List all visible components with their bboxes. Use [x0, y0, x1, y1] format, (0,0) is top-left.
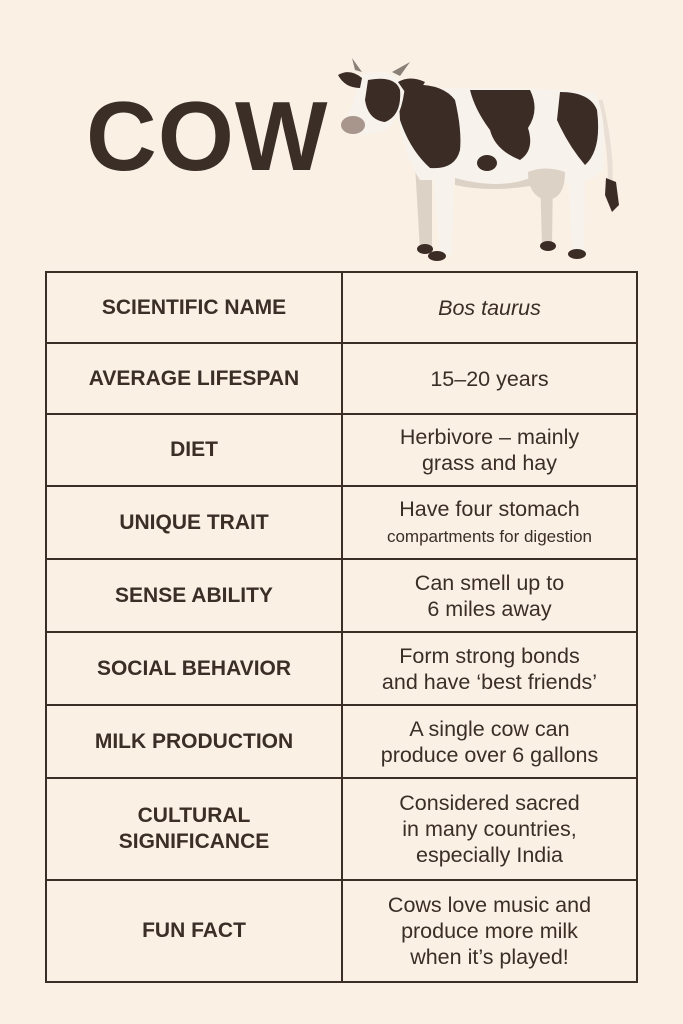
row: fun fact: FUN FACT [142, 919, 246, 942]
row: diet: Herbivore – mainly [400, 425, 579, 449]
row: sense: Can smell up to [415, 570, 564, 594]
row: unique trait: compartments for digestion [387, 526, 592, 546]
row: social [47, 633, 636, 706]
row: diet: DIET [170, 438, 218, 461]
row: lifespan: 15–20 years [430, 366, 549, 390]
row: scientific name: SCIENTIFIC NAME [102, 296, 286, 318]
body [395, 88, 604, 185]
row: fun fact: produce more milk [401, 919, 578, 943]
row: cultural [47, 779, 636, 881]
head [343, 72, 405, 135]
table [45, 271, 638, 983]
row: cultural: CULTURAL [138, 804, 250, 827]
row: milk [47, 706, 636, 779]
row: sense [47, 560, 636, 633]
row: milk: produce over 6 gallons [381, 742, 598, 766]
row: lifespan: AVERAGE LIFESPAN [89, 366, 299, 390]
row: social: SOCIAL BEHAVIOR [97, 656, 291, 680]
row: unique trait: Have four stomach [399, 496, 580, 520]
row: sense: SENSE ABILITY [115, 584, 273, 606]
icon: cow [338, 58, 619, 261]
row: diet [47, 415, 636, 487]
row: cultural: especially India [416, 843, 563, 867]
row: cultural: in many countries, [402, 817, 577, 841]
row: lifespan [47, 344, 636, 415]
udder [528, 168, 565, 200]
row: milk: A single cow can [409, 716, 570, 740]
spots [398, 85, 460, 168]
tail [600, 100, 610, 185]
row: cultural: SIGNIFICANCE [119, 830, 269, 853]
row: cultural: Considered sacred [399, 791, 580, 815]
row: fun fact: Cows love music and [388, 893, 591, 917]
back legs [540, 175, 553, 245]
front legs [415, 165, 432, 250]
row: scientific name: Bos taurus [438, 296, 541, 320]
row: social: Form strong bonds [399, 644, 580, 668]
row: milk: MILK PRODUCTION [95, 730, 293, 752]
title: COW [86, 81, 328, 191]
row: unique trait: UNIQUE TRAIT [119, 510, 269, 534]
row: diet: grass and hay [422, 451, 557, 475]
row: fun fact [142, 881, 591, 981]
row: fun fact: when it’s played! [410, 945, 569, 969]
row: social: and have ‘best friends’ [382, 670, 597, 694]
row: unique trait [47, 487, 636, 560]
row: sense: 6 miles away [427, 596, 552, 620]
hooves [417, 244, 433, 254]
row: scientific name [47, 273, 636, 344]
